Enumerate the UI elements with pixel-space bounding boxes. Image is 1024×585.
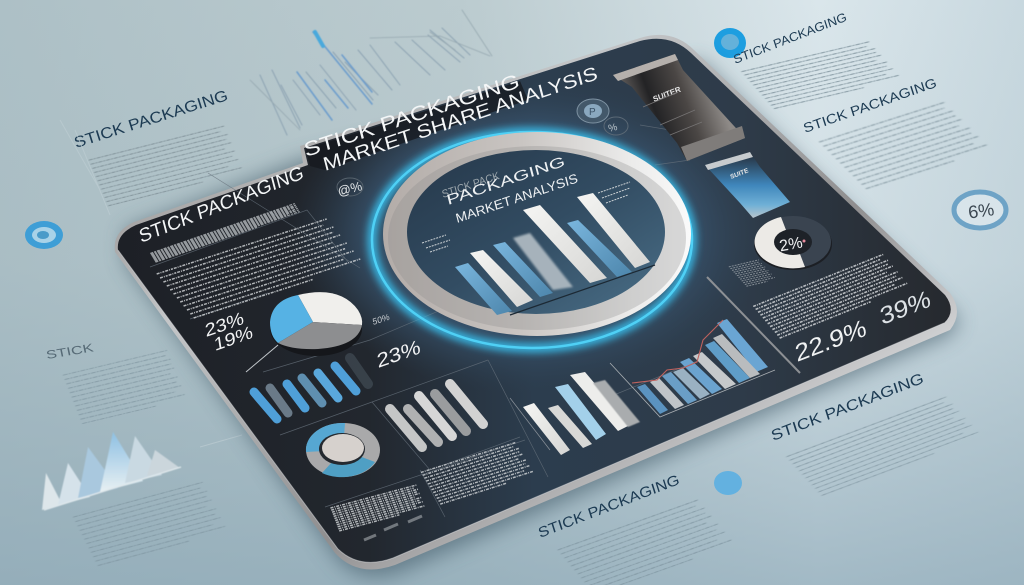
icon: small percent badge xyxy=(604,117,628,135)
blue capsule bars xyxy=(254,358,368,419)
divider lines xyxy=(150,125,700,517)
stat: 23%: 23% xyxy=(204,308,245,341)
greeked body text xyxy=(89,126,243,206)
axis xyxy=(510,265,655,315)
heading: STICK PACKAGING xyxy=(732,10,848,67)
ring bar chart xyxy=(455,193,655,315)
greeked body text xyxy=(787,397,982,495)
stat: 39%: 39% xyxy=(878,285,933,331)
icon: top blue circle xyxy=(714,28,746,58)
bar chart: lower centre xyxy=(510,372,640,455)
axes xyxy=(610,363,775,417)
heading: market share analysis: MARKET SHARE ANALYSIS xyxy=(321,63,600,176)
stat: 22.9%: 22.9% xyxy=(793,314,869,368)
greeked body text xyxy=(63,350,187,424)
icon: P badge xyxy=(577,99,609,123)
text block: top-left stick packaging xyxy=(72,87,243,206)
greeked body text xyxy=(558,500,735,585)
stat: 19%: 19% xyxy=(213,322,254,355)
stat: 23% lower: 23% xyxy=(375,336,422,373)
tube package small xyxy=(705,152,790,218)
panel: main dashboard tablet xyxy=(115,35,960,577)
panel face xyxy=(118,39,951,562)
silver ring xyxy=(383,132,691,336)
glowing ring xyxy=(372,132,692,348)
heading: STICK PACKAGING xyxy=(769,370,926,445)
title tab xyxy=(306,81,528,170)
greeked text: bottom-left xyxy=(73,482,228,566)
bars xyxy=(637,384,668,414)
panel inner edge highlight xyxy=(118,250,944,562)
panel shadow xyxy=(125,60,960,577)
icon: small percent badge: % xyxy=(607,122,619,135)
heading: STICK xyxy=(45,342,95,362)
bar and line chart: lower right xyxy=(610,319,775,417)
stat: 50%: 50% xyxy=(372,312,390,327)
icon: blue dot xyxy=(714,471,742,495)
diagonal separator xyxy=(707,277,800,373)
heading: STICK PACKAGING xyxy=(536,472,682,542)
lower right block xyxy=(421,442,535,504)
packaging title: PACKAGING xyxy=(445,153,567,208)
greeked icon text xyxy=(729,260,776,286)
tube package large: SUITER xyxy=(652,85,682,104)
heading: STICK PACKAGING xyxy=(72,87,230,152)
text block: bottom right stick packaging xyxy=(769,370,982,495)
text block: top right stick packaging xyxy=(732,10,902,109)
icon: left blue circle xyxy=(25,221,63,249)
greeked text: bottom blocks xyxy=(330,442,535,540)
blue glow xyxy=(372,132,692,348)
icon: P badge: P xyxy=(589,107,596,118)
greeked body text xyxy=(819,102,992,189)
grey cylinder bars xyxy=(390,384,483,447)
greeked subtitle xyxy=(150,203,301,262)
greeked body text xyxy=(741,42,902,109)
background spike chart: bottom-left xyxy=(42,432,181,510)
ring hole xyxy=(407,150,665,314)
icon: right percentage circle: 6% xyxy=(967,199,995,223)
heading: stick packaging left: STICK PACKAGING xyxy=(137,162,306,248)
ring heading xyxy=(441,153,580,226)
small stick pack title: STICK PACK xyxy=(441,170,501,201)
lower left block xyxy=(330,485,425,531)
small footnote icons xyxy=(364,516,422,540)
pie chart xyxy=(270,292,362,356)
panel frame xyxy=(115,35,957,569)
text block: bottom centre stick packaging xyxy=(536,472,735,585)
pie leader line xyxy=(246,345,278,372)
text block: left stick xyxy=(45,342,187,424)
market analysis title: MARKET ANALYSIS xyxy=(454,170,580,226)
heading: stick packaging top: STICK PACKAGING xyxy=(302,70,522,162)
icon: percent badge: @% xyxy=(336,178,364,199)
greeked text: right block xyxy=(753,254,910,338)
donut chart 2% xyxy=(754,216,832,270)
icon: right percentage circle xyxy=(954,192,1006,228)
decorative thin connector xyxy=(60,120,242,447)
text block: right stick packaging xyxy=(801,75,992,189)
heading: STICK PACKAGING xyxy=(801,75,938,136)
tube package large xyxy=(613,54,745,161)
greeked notes inside ring xyxy=(422,182,630,252)
background spike chart: top xyxy=(250,10,492,135)
tube package small: SUITE xyxy=(729,167,750,181)
ring inner shadow xyxy=(388,146,686,330)
donut gauge xyxy=(306,423,380,477)
blue rim xyxy=(372,132,692,348)
greeked text: left block xyxy=(157,219,364,318)
donut chart 2%: 2% xyxy=(778,235,804,255)
panel blue sheen xyxy=(118,39,951,562)
red trend line xyxy=(632,320,723,383)
